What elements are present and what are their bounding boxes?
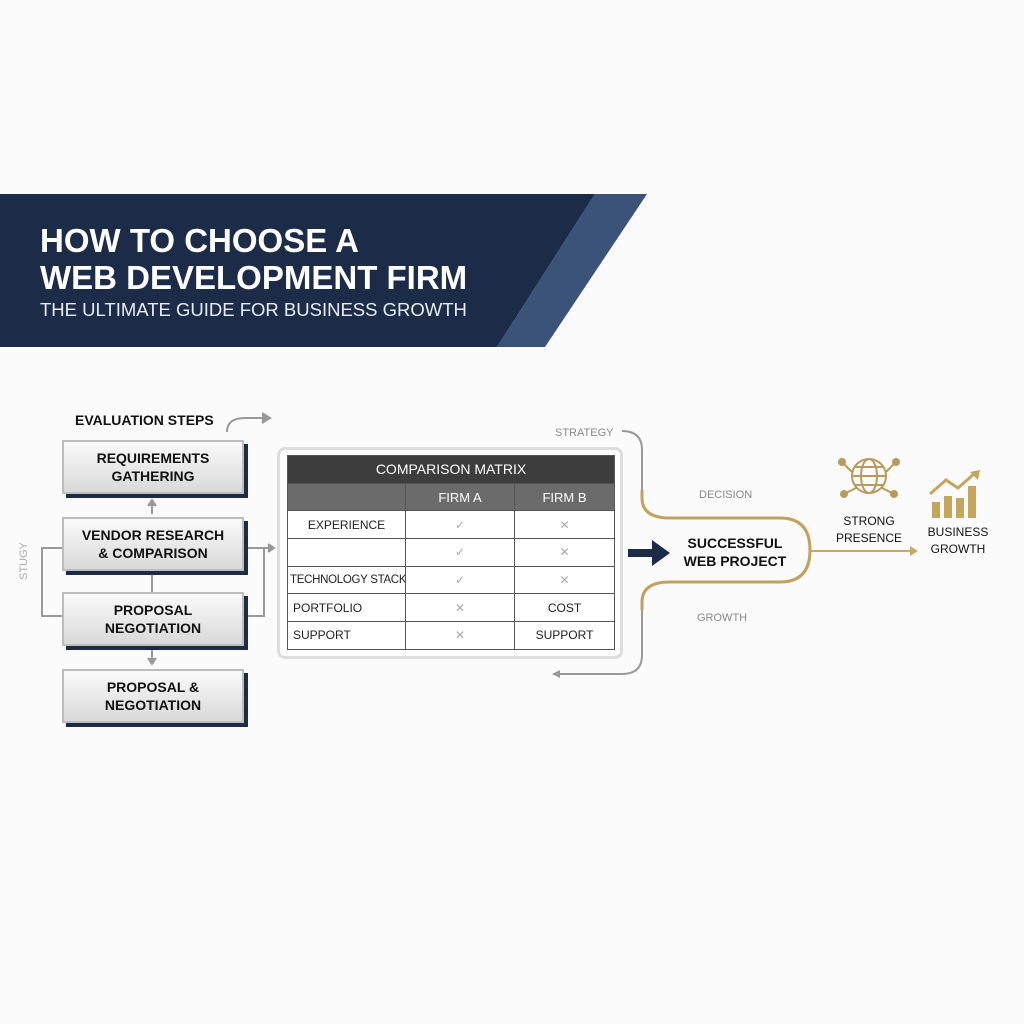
comparison matrix: SUPPORT bbox=[536, 628, 593, 642]
step 4: PROPOSAL & bbox=[107, 679, 199, 695]
label: stugy: STUGY bbox=[18, 542, 30, 580]
strong presence bbox=[836, 514, 902, 545]
banner bbox=[0, 194, 647, 347]
comparison matrix bbox=[277, 447, 623, 659]
step 4: NEGOTIATION bbox=[105, 697, 201, 713]
icon: globe bbox=[838, 458, 900, 498]
subtitle: THE ULTIMATE GUIDE FOR BUSINESS GROWTH bbox=[40, 299, 467, 320]
comparison matrix: ✕ bbox=[559, 518, 570, 532]
icon: growth chart bbox=[929, 470, 980, 518]
comparison matrix: ✕ bbox=[559, 545, 570, 559]
step 2: & COMPARISON bbox=[98, 545, 208, 561]
title: WEB DEVELOPMENT FIRM bbox=[40, 259, 467, 296]
comparison matrix: ✕ bbox=[455, 601, 465, 615]
step 3 bbox=[62, 592, 244, 646]
comparison matrix: ✓ bbox=[455, 545, 465, 559]
comparison matrix: ✕ bbox=[455, 628, 465, 642]
text: DECISION bbox=[699, 489, 752, 501]
comparison matrix: ✕ bbox=[559, 573, 570, 587]
comparison matrix: SUPPORT bbox=[293, 628, 351, 642]
heading: evaluation steps: EVALUATION STEPS bbox=[75, 412, 214, 428]
step 3: NEGOTIATION bbox=[105, 620, 201, 636]
step 2 bbox=[62, 517, 244, 571]
step 1: REQUIREMENTS bbox=[97, 450, 209, 466]
business growth bbox=[928, 525, 988, 556]
comparison matrix: ✓ bbox=[455, 573, 465, 587]
title: HOW TO CHOOSE A bbox=[40, 222, 359, 259]
successful web project: WEB PROJECT bbox=[684, 553, 786, 569]
flow labels: STRATEGY bbox=[555, 427, 613, 439]
step 1 bbox=[62, 440, 244, 494]
comparison matrix: COST bbox=[548, 601, 581, 615]
comparison matrix: ✓ bbox=[455, 518, 465, 532]
comparison matrix: EXPERIENCE bbox=[308, 518, 385, 532]
step 1: GATHERING bbox=[112, 468, 194, 484]
comparison matrix: TECHNOLOGY STACK bbox=[290, 574, 406, 586]
comparison matrix: PORTFOLIO bbox=[293, 601, 362, 615]
step 3: PROPOSAL bbox=[114, 602, 192, 618]
comparison matrix: COMPARISON MATRIX bbox=[376, 461, 526, 477]
title bbox=[40, 222, 467, 296]
business growth: GROWTH bbox=[931, 542, 985, 556]
strong presence: STRONG bbox=[843, 514, 895, 528]
successful web project bbox=[684, 535, 786, 569]
strong presence: PRESENCE bbox=[836, 531, 902, 545]
step 4 bbox=[62, 669, 244, 723]
connectors bbox=[41, 412, 276, 666]
business growth: BUSINESS bbox=[928, 525, 988, 539]
flow lines bbox=[552, 430, 918, 678]
comparison matrix: FIRM A bbox=[438, 490, 482, 505]
step 2: VENDOR RESEARCH bbox=[82, 527, 224, 543]
comparison matrix: FIRM B bbox=[542, 490, 587, 505]
text: GROWTH bbox=[697, 612, 747, 624]
successful web project: SUCCESSFUL bbox=[688, 535, 782, 551]
